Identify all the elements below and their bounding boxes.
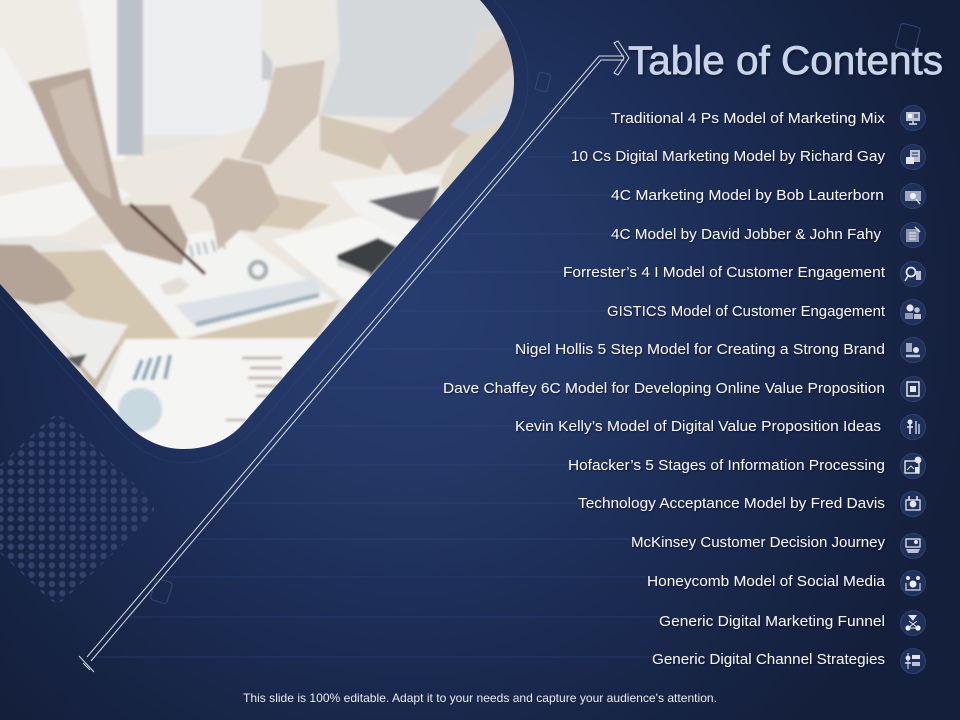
item 12: McKinsey Customer Decision Journey [631, 534, 885, 551]
icon: ideas [900, 414, 926, 440]
row guide lines [95, 118, 658, 657]
decorative outline around photo [0, 0, 528, 463]
icon: documents [900, 144, 926, 170]
icon badges [900, 106, 926, 674]
item 14: Generic Digital Marketing Funnel [659, 613, 885, 630]
item 6: GISTICS Model of Customer Engagement [607, 303, 886, 320]
laptop [330, 172, 450, 240]
photo: team working over charts at a desk [0, 0, 514, 449]
pen [130, 204, 205, 274]
contents list [443, 110, 886, 668]
diagonal double arrow [79, 41, 629, 672]
icon: analysis screen [900, 184, 926, 208]
icon: people [900, 300, 926, 324]
item 13: Honeycomb Model of Social Media [647, 573, 886, 590]
icon: technology person [900, 492, 926, 516]
item 11: Technology Acceptance Model by Fred Davis [578, 495, 885, 512]
item 9: Kevin Kelly’s Model of Digital Value Proposition Ideas [515, 418, 881, 435]
icon: channel flow chart [900, 648, 926, 674]
lower papers [102, 336, 318, 449]
icon: gears and magnifier [900, 262, 926, 286]
icon: monitor [900, 106, 926, 130]
item 7: Nigel Hollis 5 Step Model for Creating a Strong Brand [515, 341, 885, 358]
icon: funnel [900, 610, 926, 636]
item 8: Dave Chaffey 6C Model for Developing Online Value Proposition [443, 380, 885, 397]
right person shirt [320, 0, 513, 134]
icon: value document [900, 376, 926, 402]
item 3: 4C Marketing Model by Bob Lauterborn [611, 187, 884, 204]
icon: checklist [900, 222, 926, 248]
icon: journey map [900, 534, 926, 558]
item 2: 10 Cs Digital Marketing Model by Richard Gay [571, 148, 886, 165]
decorative rounded rectangles [150, 23, 921, 604]
lower left hand [0, 244, 75, 305]
dot pattern diamond [0, 416, 154, 602]
icon: information chart [900, 454, 926, 478]
item 10: Hofacker’s 5 Stages of Information Processing [568, 457, 885, 474]
item 15: Generic Digital Channel Strategies [652, 651, 885, 668]
notebook, phone [273, 216, 403, 302]
item 1: Traditional 4 Ps Model of Marketing Mix [611, 110, 886, 127]
paper with donut [100, 228, 335, 339]
item 4: 4C Model by David Jobber & John Fahy [611, 226, 882, 243]
icon: brand steps [900, 338, 926, 362]
icon: social network [900, 570, 926, 596]
right person arm and hand [240, 60, 325, 165]
item 5: Forrester’s 4 I Model of Customer Engagement [563, 264, 886, 281]
footer note: This slide is 100% editable. Adapt it to your needs and capture your audience's attention. [243, 691, 717, 705]
title: Table of Contents [628, 39, 943, 83]
left person shirt and arm [0, 0, 92, 92]
